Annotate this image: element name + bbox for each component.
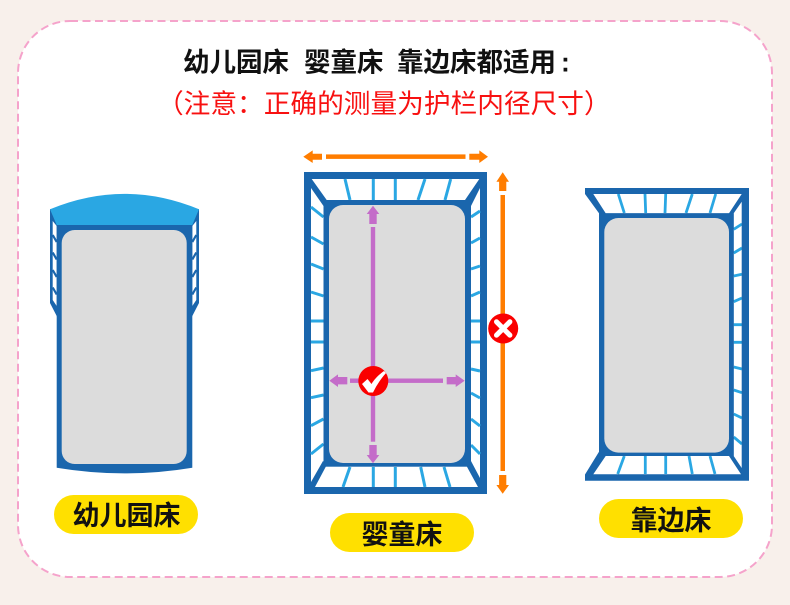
side rail openings: [53, 221, 196, 306]
label: bedside crib: 靠边床: [630, 506, 712, 536]
bed frame: [57, 222, 192, 473]
mattress: [604, 218, 729, 453]
title: :: [561, 48, 570, 78]
title: 幼儿园床: [183, 48, 289, 78]
label: infant crib: 婴童床: [362, 520, 442, 550]
rail slats: [618, 194, 742, 474]
arrow: correct length: [367, 206, 379, 463]
corner posts: [309, 178, 482, 487]
label: kindergarten bed: 幼儿园床: [72, 501, 180, 531]
inner frame: [324, 200, 471, 467]
label: kindergarten bed: [54, 495, 198, 534]
title: 婴童床: [304, 48, 384, 78]
inner frame: [599, 213, 734, 456]
panel: infant crib: [308, 176, 484, 490]
top rail and corners: [585, 188, 749, 481]
subtitle: measurement note: （注意：正确的测量为护栏内径尺寸）: [157, 89, 611, 119]
icon: red cross mark: [488, 314, 518, 344]
panel: bedside crib: [585, 188, 749, 481]
title: 靠边床都适用: [397, 48, 556, 78]
headboard: [50, 194, 199, 225]
open rail areas: [593, 194, 742, 474]
panel: kindergarten bed: [50, 194, 199, 473]
mattress: [62, 230, 187, 464]
label: infant crib: [330, 513, 474, 552]
label: bedside crib: [599, 499, 743, 538]
mattress: [329, 205, 465, 463]
arrow: correct width: [329, 374, 465, 387]
arrow: incorrect length: [496, 172, 509, 494]
outer rail: [308, 176, 484, 490]
arrow: incorrect width: [303, 150, 488, 163]
icon: red check mark: [358, 366, 388, 396]
side rail wings: [50, 209, 199, 322]
side rail slats: [53, 235, 196, 294]
rail slats: [311, 179, 480, 487]
